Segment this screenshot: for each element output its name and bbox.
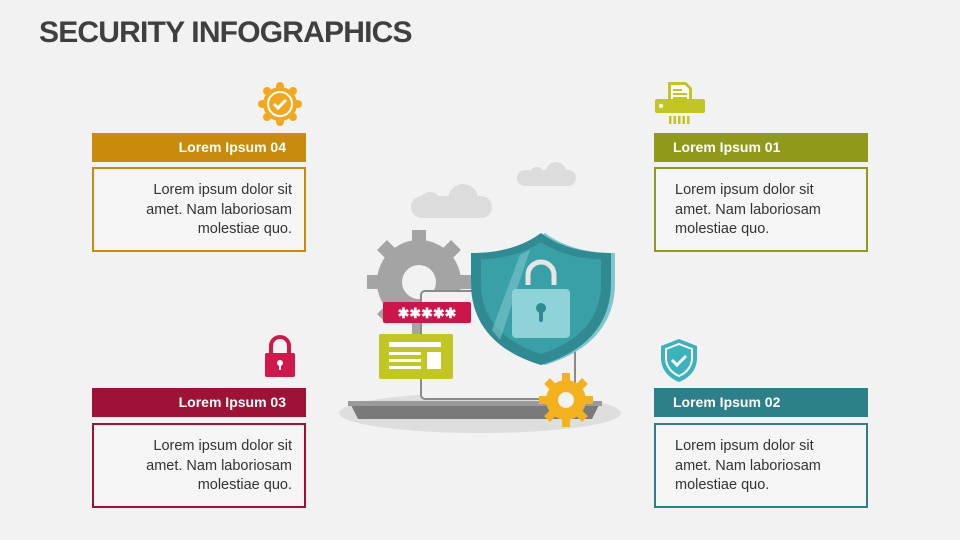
icon: lock: [265, 335, 295, 377]
icon: badge: [258, 82, 302, 126]
text block 01: molestiae quo.: [675, 221, 769, 237]
shadow: [339, 393, 621, 433]
title: SECURITY INFOGRAPHICS: [39, 16, 412, 49]
header: Lorem Ipsum 01: [654, 133, 868, 162]
text block 01: [654, 167, 868, 252]
text block 01: amet. Nam laboriosam: [675, 202, 821, 218]
text block 02: molestiae quo.: [675, 477, 769, 493]
header: Lorem Ipsum 03: Lorem Ipsum 03: [179, 394, 286, 410]
header: Lorem Ipsum 03: [92, 388, 306, 417]
icon: shield check: [661, 339, 697, 382]
text block 04: molestiae quo.: [198, 221, 292, 237]
text block 03: molestiae quo.: [198, 477, 292, 493]
cloud left: [411, 184, 492, 218]
header: Lorem Ipsum 01: Lorem Ipsum 01: [673, 139, 780, 155]
text block 04: [92, 167, 306, 252]
text block 01: Lorem ipsum dolor sit: [675, 182, 814, 198]
form card: [379, 334, 453, 379]
text block 03: [92, 423, 306, 508]
cloud right: [517, 162, 576, 186]
text block 04: Lorem ipsum dolor sit: [153, 182, 292, 198]
icon: shredder: [655, 82, 705, 124]
text block 03: amet. Nam laboriosam: [146, 458, 292, 474]
header: Lorem Ipsum 02: Lorem Ipsum 02: [673, 394, 780, 410]
text block 02: [654, 423, 868, 508]
small gold gear: [539, 373, 593, 427]
header: Lorem Ipsum 04: Lorem Ipsum 04: [179, 139, 286, 155]
header: Lorem Ipsum 02: [654, 388, 868, 417]
header: Lorem Ipsum 04: [92, 133, 306, 162]
text block 04: amet. Nam laboriosam: [146, 202, 292, 218]
text block 03: Lorem ipsum dolor sit: [153, 438, 292, 454]
password bar: ✱✱✱✱✱: [398, 305, 457, 321]
central illustration: [339, 162, 621, 433]
laptop: [348, 291, 602, 419]
big gear: [367, 230, 471, 334]
text block 02: amet. Nam laboriosam: [675, 458, 821, 474]
text block 02: Lorem ipsum dolor sit: [675, 438, 814, 454]
password bar: [383, 302, 471, 323]
shield: [471, 233, 615, 365]
